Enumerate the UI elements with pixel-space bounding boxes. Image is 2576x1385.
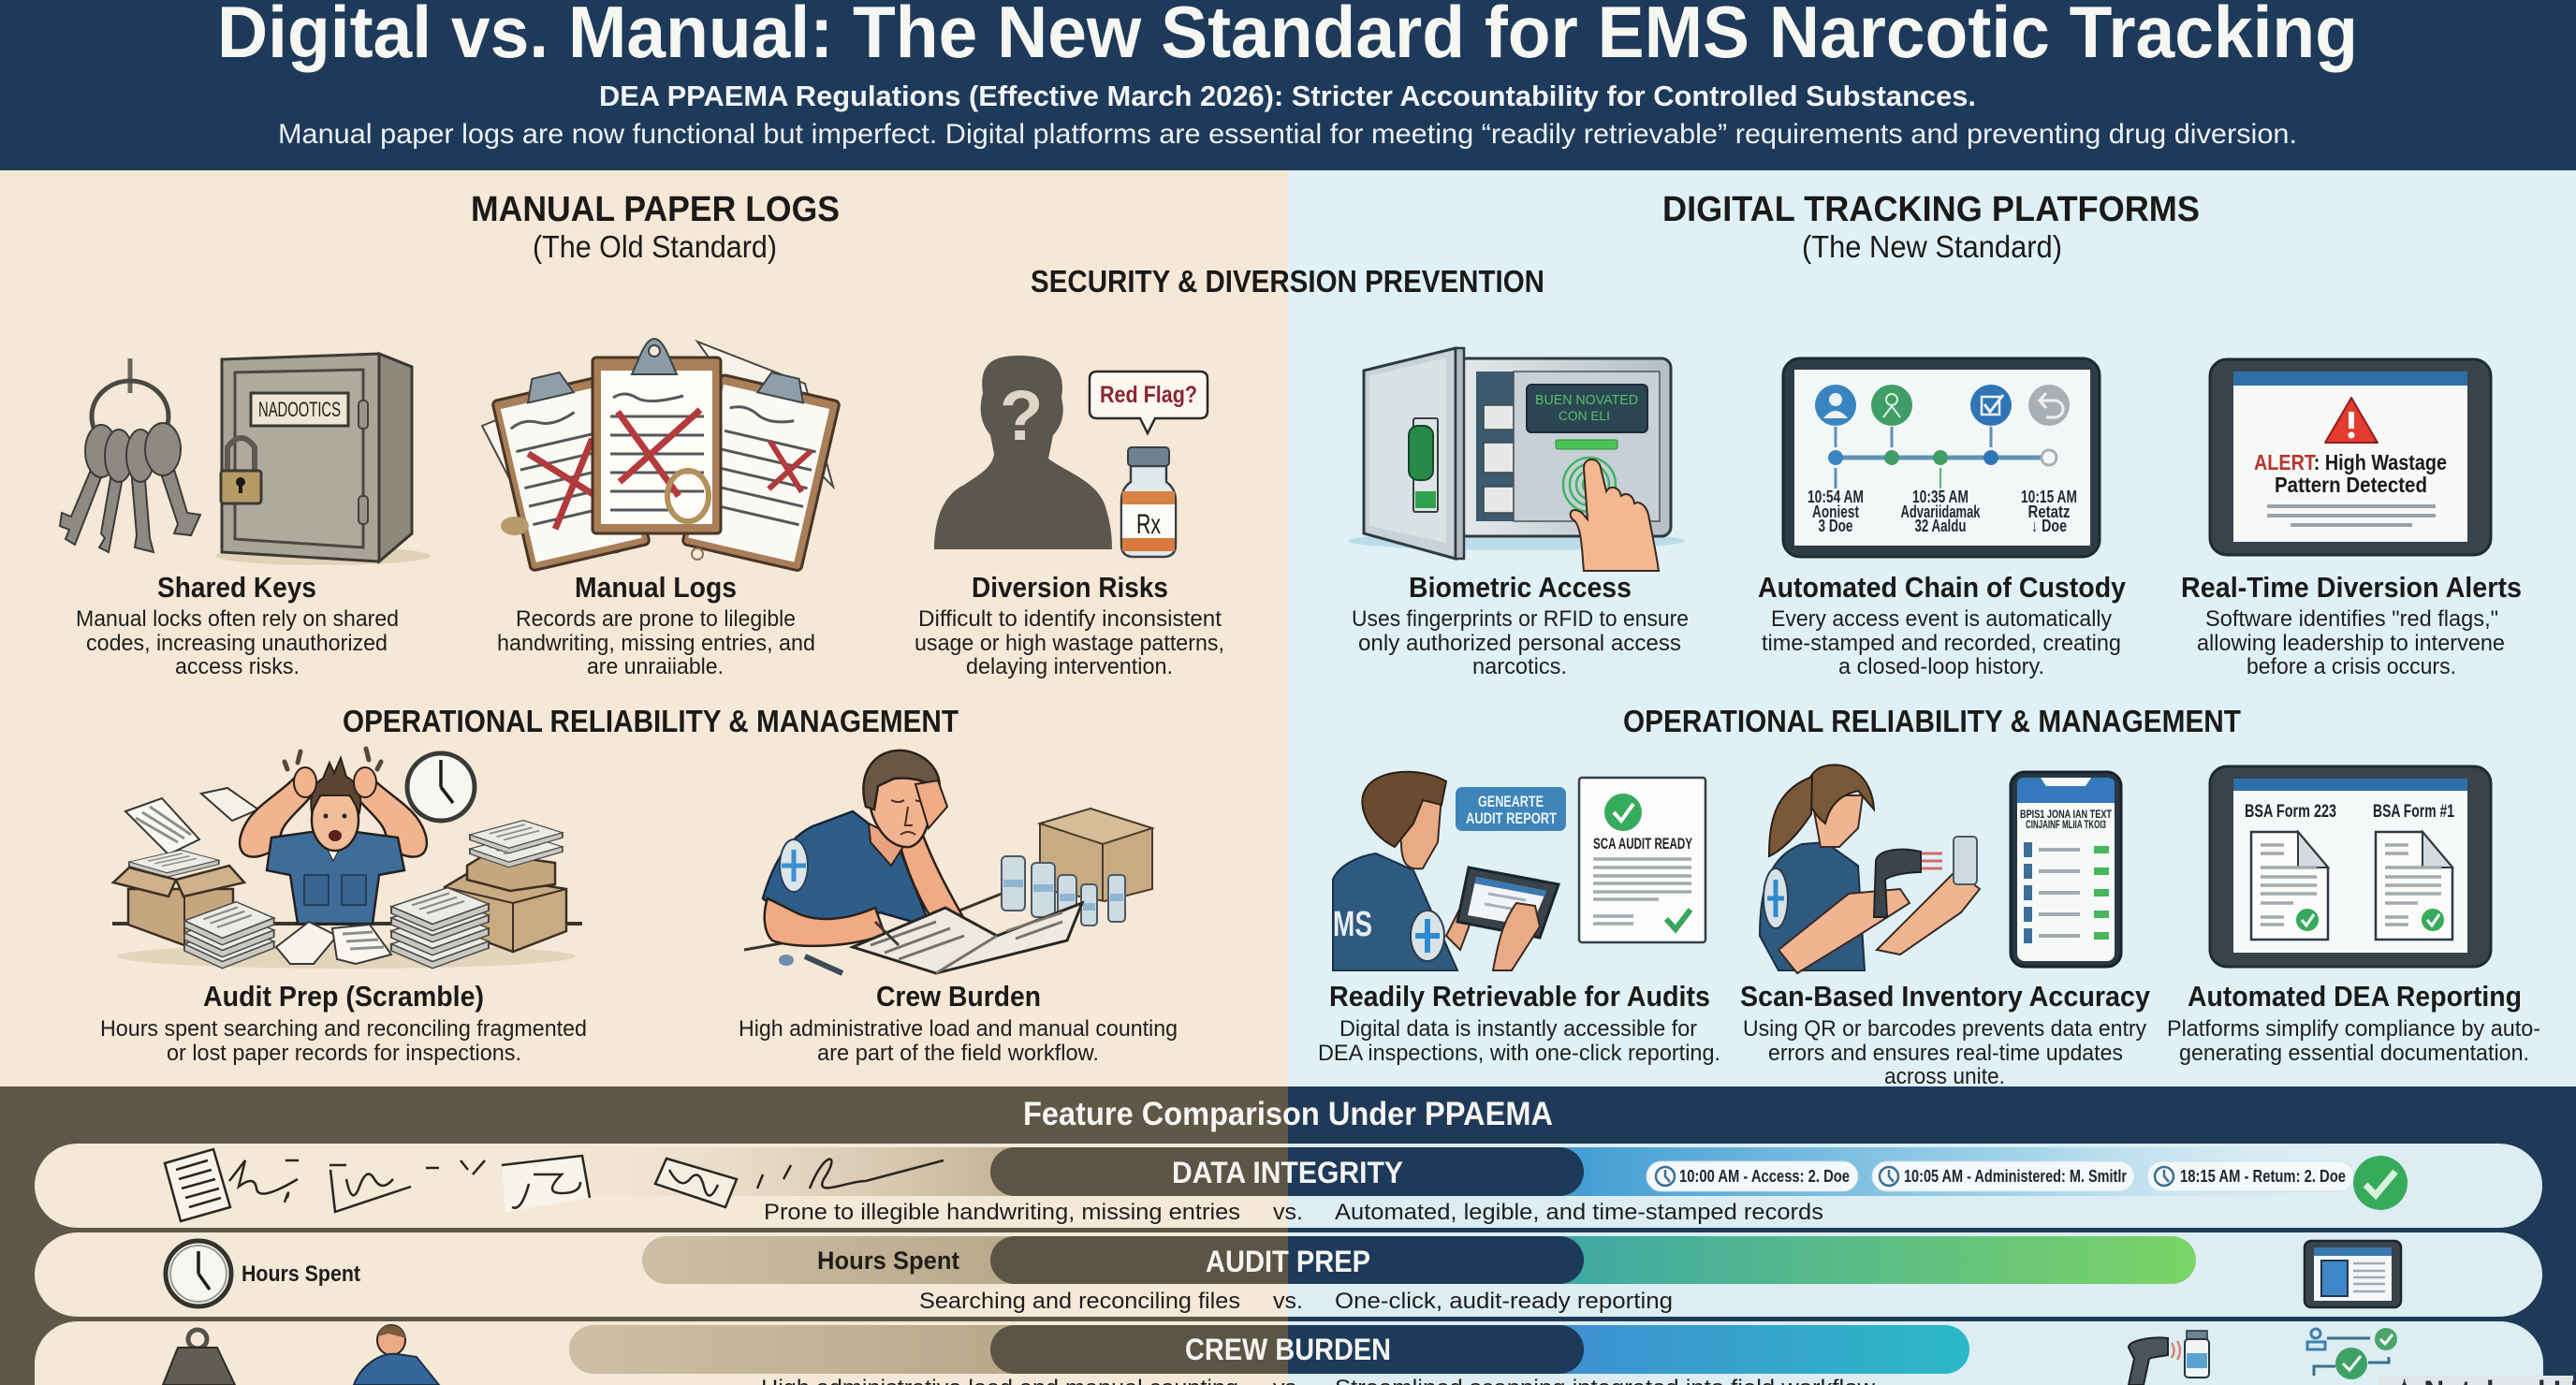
item text: shared keys: access risks. bbox=[175, 654, 300, 679]
item text: shared keys: codes, increasing unauthorized bbox=[86, 631, 388, 656]
icon: diversion alert tablet bbox=[2210, 359, 2491, 555]
text: audit prep comparison: One-click, audit-ready reporting bbox=[1335, 1289, 1673, 1314]
item text: real-time diversion alerts: allowing leadership to intervene bbox=[2197, 631, 2505, 656]
illustration: audit report on tablet: SCA AUDIT READY bbox=[1593, 835, 1692, 853]
item text: readily retrievable bbox=[1318, 980, 1720, 1066]
row: audit prep: Hours Spent bbox=[242, 1261, 360, 1287]
icon: weight bbox=[163, 1330, 235, 1385]
heading: digital tracking platforms: (The New Standard) bbox=[1802, 229, 2062, 264]
item text: diversion risks: Difficult to identify inconsistent bbox=[918, 606, 1222, 632]
icon: diversion alert tablet: Pattern Detected bbox=[2275, 473, 2427, 497]
icon: chain of custody tablet: 32 Aaldu bbox=[1915, 517, 1966, 535]
item text: crew burden: Crew Burden bbox=[876, 980, 1041, 1013]
timestamp chips: 10:05 AM - Administered: M. Smitlr bbox=[1904, 1167, 2127, 1186]
right background panel bbox=[1288, 168, 2576, 1090]
header banner bbox=[0, 0, 2576, 170]
item text: automated chain of custody bbox=[1758, 571, 2127, 679]
item text: real-time diversion alerts bbox=[2181, 571, 2522, 679]
illustration: automated DEA reporting tablet: BSA Form 223 bbox=[2245, 802, 2336, 822]
panel: feature comparison bbox=[0, 1086, 2576, 1385]
icon: chain of custody tablet: 10:15 AM bbox=[2021, 488, 2077, 506]
icon: scanner and vial bbox=[2129, 1331, 2209, 1385]
item text: real-time diversion alerts: Software identifies "red flags," bbox=[2205, 606, 2498, 632]
item text: shared keys: Shared Keys bbox=[157, 571, 316, 604]
icon: biometric safe bbox=[1348, 348, 1685, 571]
illustration: automated DEA reporting tablet bbox=[2210, 766, 2491, 967]
heading: manual paper logs: MANUAL PAPER LOGS bbox=[471, 190, 840, 229]
illustration: scan-based inventory bbox=[1760, 765, 2121, 973]
item text: biometric access: Uses fingerprints or RFID to ensure bbox=[1352, 606, 1689, 632]
icon: silhouette with question mark and vial: ? bbox=[1000, 376, 1043, 456]
icon: chain of custody tablet: ↓ Doe bbox=[2031, 517, 2067, 535]
heading: manual paper logs: (The Old Standard) bbox=[533, 229, 777, 264]
item text: diversion risks bbox=[915, 571, 1224, 679]
item text: biometric access: narcotics. bbox=[1472, 654, 1567, 679]
heading: manual paper logs bbox=[471, 190, 840, 264]
icon: chain of custody tablet: 10:35 AM bbox=[1912, 488, 1969, 506]
item text: diversion risks: usage or high wastage patterns, bbox=[915, 631, 1224, 656]
item text: real-time diversion alerts: Real-Time Diversion Alerts bbox=[2181, 571, 2522, 604]
icon: clock bbox=[166, 1241, 231, 1306]
item text: automated DEA reporting: Platforms simplify compliance by auto- bbox=[2167, 1016, 2540, 1042]
item text: scan-based inventory: Using QR or barcodes prevents data entry bbox=[1743, 1016, 2147, 1042]
item text: biometric access: only authorized personal access bbox=[1358, 631, 1681, 656]
subtitle: DEA PPAEMA Regulations (Effective March 2026): Stricter Accountability for Controlled Substances. bbox=[599, 80, 1976, 112]
icon: clipboards with crossed-out logs bbox=[482, 339, 842, 571]
heading: digital tracking platforms bbox=[1662, 190, 2200, 264]
item text: manual logs: handwriting, missing entries, and bbox=[497, 631, 815, 656]
comparison heading: Feature Comparison Under PPAEMA bbox=[1023, 1096, 1553, 1132]
illustration: audit report on tablet bbox=[1333, 772, 1705, 970]
item text: shared keys bbox=[76, 571, 399, 679]
timestamp chips bbox=[1647, 1161, 2354, 1191]
item text: manual logs: Records are prone to lilegible bbox=[516, 606, 796, 632]
icon: chain of custody tablet bbox=[1783, 358, 2100, 557]
illustration: crew burden paramedic bbox=[744, 751, 1152, 973]
item text: crew burden: are part of the field workflow. bbox=[817, 1041, 1099, 1066]
icon: shared keys and locked cabinet: NADOOTICS bbox=[258, 398, 341, 421]
item text: diversion risks: delaying intervention. bbox=[966, 654, 1173, 679]
icon: chain of custody tablet: Aoniest bbox=[1812, 503, 1859, 521]
icon: silhouette with question mark and vial bbox=[934, 356, 1208, 557]
heading: security and diversion prevention: SECURITY & DIVERSION PREVENTION bbox=[1031, 264, 1544, 299]
item text: automated DEA reporting: generating essential documentation. bbox=[2179, 1041, 2529, 1066]
illustration: scan-based inventory: CINJAINF MLIIA TKOI3 bbox=[2026, 820, 2106, 831]
illustration: audit report on tablet: GENEARTE bbox=[1478, 793, 1544, 810]
timestamp chips: 18:15 AM - Retum: 2. Doe bbox=[2180, 1167, 2346, 1186]
item text: biometric access: Biometric Access bbox=[1409, 571, 1632, 604]
icon: diversion alert tablet: ALERT: High Wastage bbox=[2254, 450, 2447, 474]
row: audit prep: Hours Spent bbox=[817, 1246, 959, 1275]
item text: audit prep: Hours spent searching and reconciling fragmented bbox=[100, 1016, 587, 1042]
item text: automated chain of custody: time-stamped and recorded, creating bbox=[1762, 631, 2121, 656]
item text: automated chain of custody: Every access event is automatically bbox=[1771, 606, 2113, 632]
row: crew burden: CREW BURDEN bbox=[1185, 1333, 1391, 1366]
illustration: audit report on tablet: AUDIT REPORT bbox=[1466, 809, 1557, 827]
item text: audit prep: or lost paper records for inspections. bbox=[167, 1041, 521, 1066]
item text: manual logs: are unraiiable. bbox=[587, 654, 724, 679]
illustration: audit report on tablet: MS bbox=[1333, 905, 1372, 944]
item text: scan-based inventory bbox=[1740, 980, 2151, 1089]
item text: crew burden bbox=[739, 980, 1178, 1066]
item text: automated chain of custody: a closed-loop history. bbox=[1838, 654, 2044, 679]
item text: scan-based inventory: Scan-Based Inventory Accuracy bbox=[1740, 980, 2151, 1013]
icon: chain of custody tablet: Retatz bbox=[2027, 503, 2071, 521]
item text: scan-based inventory: across unite. bbox=[1884, 1064, 2005, 1089]
left background panel bbox=[0, 168, 1288, 1090]
row: data integrity: DATA INTEGRITY bbox=[1172, 1156, 1403, 1189]
row: audit prep bbox=[35, 1232, 2542, 1317]
item text: diversion risks: Diversion Risks bbox=[972, 571, 1168, 604]
item text: shared keys: Manual locks often rely on shared bbox=[76, 606, 399, 632]
icon: green check bbox=[2353, 1156, 2408, 1210]
text: data integrity comparison: vs. bbox=[1273, 1200, 1303, 1225]
icon: shared keys and locked cabinet bbox=[60, 354, 431, 565]
item text: automated DEA reporting: Automated DEA Reporting bbox=[2188, 980, 2522, 1013]
illustration: automated DEA reporting tablet: BSA Form #1 bbox=[2373, 802, 2454, 822]
row: crew burden bbox=[35, 1321, 2576, 1385]
intro sentence: Manual paper logs are now functional but imperfect. Digital platforms are essential for meeting “readily retrievable” requirements and preventing drug diversion. bbox=[278, 119, 2297, 150]
icon: biometric safe: BUEN NOVATED bbox=[1535, 392, 1638, 408]
row: data integrity bbox=[35, 1144, 2542, 1228]
text: data integrity comparison: Prone to illegible handwriting, missing entries bbox=[764, 1200, 1240, 1225]
item text: readily retrievable: Digital data is instantly accessible for bbox=[1339, 1016, 1697, 1042]
icon: silhouette with question mark and vial: Red Flag? bbox=[1100, 382, 1197, 408]
icon: chain of custody tablet: 10:54 AM bbox=[1808, 488, 1864, 506]
item text: biometric access bbox=[1352, 571, 1689, 679]
icon: workflow checks bbox=[2307, 1328, 2397, 1379]
item text: scan-based inventory: errors and ensures real-time updates bbox=[1768, 1041, 2123, 1066]
item text: manual logs: Manual Logs bbox=[575, 571, 737, 604]
item text: automated DEA reporting bbox=[2167, 980, 2540, 1066]
text: data integrity comparison: Automated, legible, and time-stamped records bbox=[1335, 1200, 1823, 1225]
icon: report tablet bbox=[2305, 1241, 2401, 1307]
icon: silhouette with question mark and vial: Rx bbox=[1136, 509, 1161, 540]
icon: chain of custody tablet: 3 Doe bbox=[1818, 517, 1853, 535]
icon: biometric safe: CON ELI bbox=[1559, 408, 1610, 423]
item text: audit prep bbox=[100, 980, 587, 1066]
illustration: audit prep scramble bbox=[112, 749, 582, 969]
item text: automated chain of custody: Automated Chain of Custody bbox=[1758, 571, 2127, 604]
text: data integrity comparison bbox=[764, 1200, 1823, 1225]
icon: handwritten notes bbox=[165, 1149, 944, 1221]
icon: chain of custody tablet: Advariidamak bbox=[1900, 503, 1981, 521]
text: crew burden comparison bbox=[761, 1376, 1875, 1385]
icon: paramedic writing bbox=[354, 1325, 439, 1385]
text: audit prep comparison: Searching and reconciling files bbox=[919, 1289, 1240, 1314]
timestamp chips: 10:00 AM - Access: 2. Doe bbox=[1679, 1167, 1850, 1186]
item text: manual logs bbox=[497, 571, 815, 679]
illustration: scan-based inventory: BPIS1 JONA IAN TEXT bbox=[2020, 809, 2112, 821]
item text: audit prep: Audit Prep (Scramble) bbox=[203, 980, 484, 1013]
row: audit prep: AUDIT PREP bbox=[1206, 1245, 1370, 1278]
heading: operational reliability, left: OPERATIONAL RELIABILITY & MANAGEMENT bbox=[343, 704, 959, 738]
item text: readily retrievable: Readily Retrievable for Audits bbox=[1329, 980, 1710, 1013]
item text: real-time diversion alerts: before a crisis occurs. bbox=[2247, 654, 2456, 679]
item text: readily retrievable: DEA inspections, with one-click reporting. bbox=[1318, 1041, 1720, 1066]
heading: digital tracking platforms: DIGITAL TRACKING PLATFORMS bbox=[1662, 190, 2200, 229]
text: audit prep comparison bbox=[919, 1289, 1673, 1314]
item text: crew burden: High administrative load and manual counting bbox=[739, 1016, 1178, 1042]
text: audit prep comparison: vs. bbox=[1273, 1289, 1303, 1314]
heading: operational reliability, right: OPERATIONAL RELIABILITY & MANAGEMENT bbox=[1623, 704, 2241, 738]
